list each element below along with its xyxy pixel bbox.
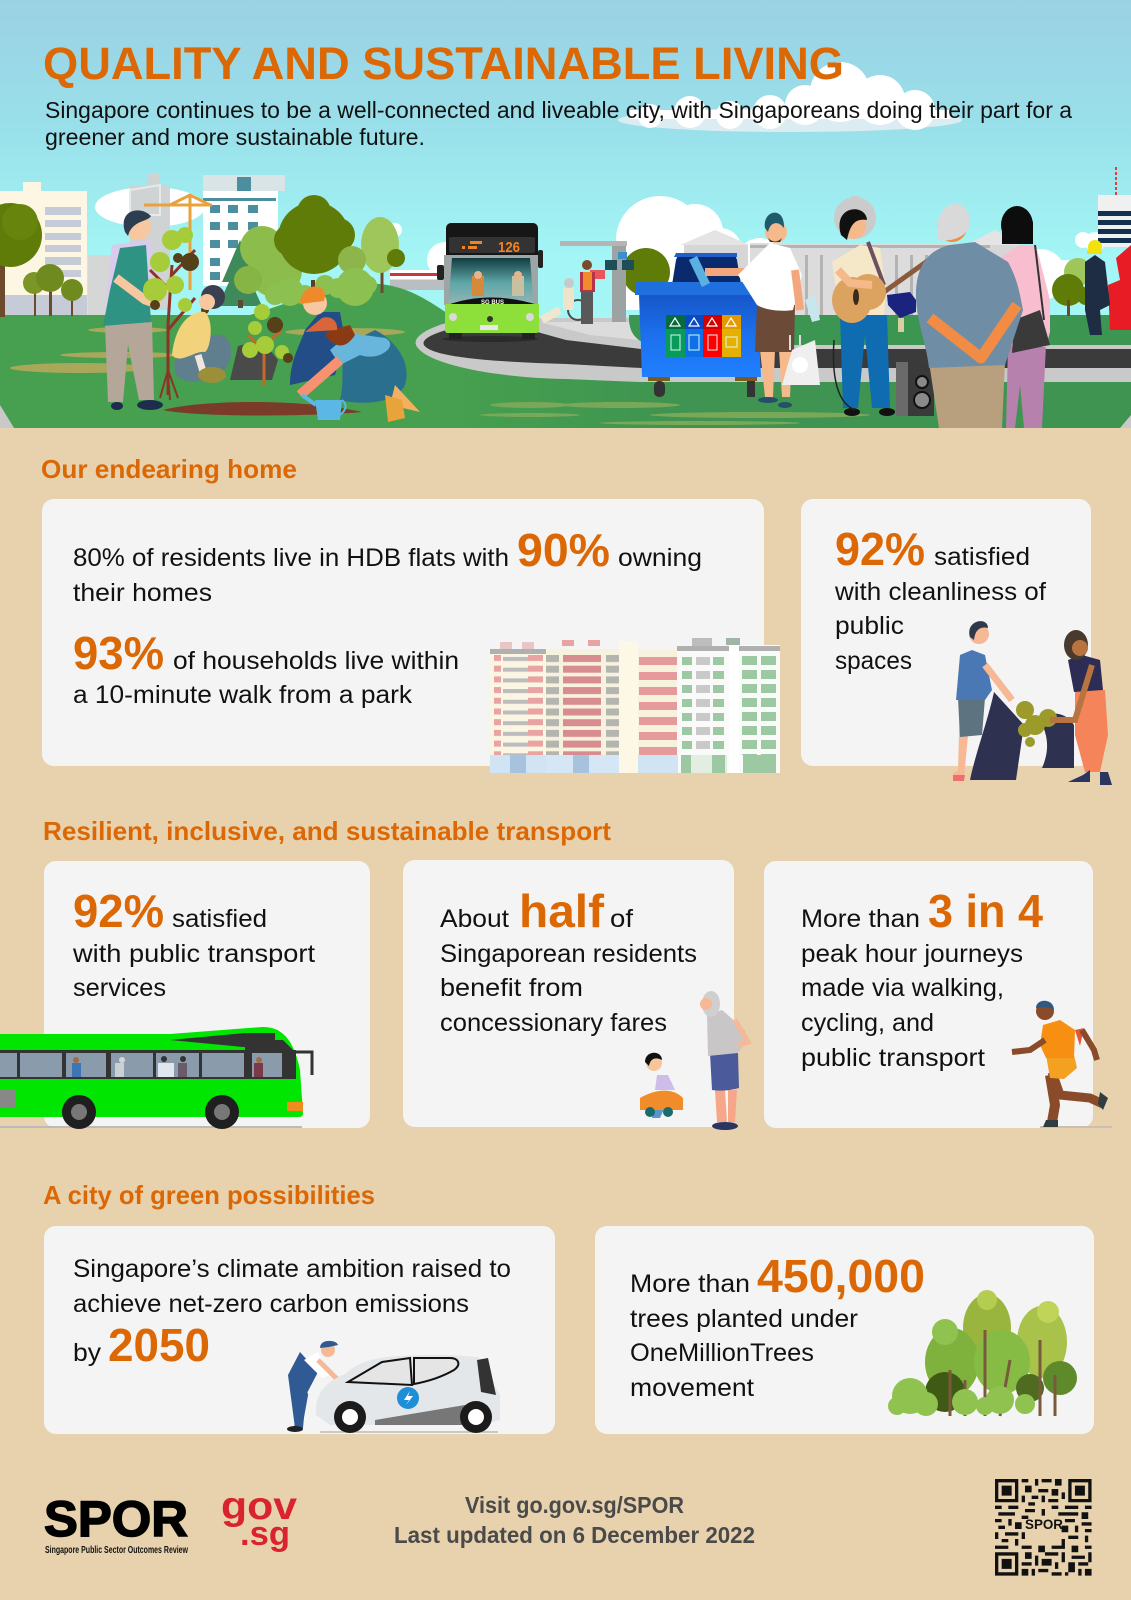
housing stat text: 80% of residents live in HDB flats with — [73, 544, 509, 572]
footer text: Visit go.gov.sg/SPOR — [465, 1492, 684, 1518]
bus bay road — [416, 318, 1131, 382]
striped tower — [1098, 167, 1131, 247]
concession text: of — [610, 905, 633, 933]
soil patch — [163, 402, 362, 416]
person: man in safety vest — [580, 260, 595, 324]
park access stat text: of households live within — [173, 647, 459, 675]
grass beyond road — [629, 315, 1131, 345]
walk cycle transit text: peak hour journeys — [801, 940, 1023, 968]
housing stat text: 90% — [517, 524, 610, 576]
park access stat text: 93% — [73, 627, 164, 679]
net zero text: by — [73, 1339, 102, 1367]
intro text — [45, 97, 1072, 150]
icon: grove of trees — [888, 1290, 1077, 1416]
heart sculptures — [805, 292, 916, 332]
walk cycle transit text: More than — [801, 905, 920, 933]
icon: grandmother and child — [640, 991, 748, 1130]
icon: runner — [1012, 1001, 1112, 1128]
person: busker with guitar — [832, 209, 940, 416]
net zero text — [73, 1255, 511, 1371]
background clouds — [95, 187, 1105, 310]
trees left — [0, 195, 405, 317]
parliament building — [680, 196, 1020, 315]
hill and grass — [0, 283, 450, 428]
heading: transport: Resilient, inclusive, and sustainable transport — [43, 816, 611, 846]
person: man with orange helmet — [290, 286, 345, 385]
person: older man from behind — [916, 204, 1023, 428]
icon: volunteers bagging leaves — [952, 621, 1112, 785]
transport satisfaction text — [72, 885, 315, 1002]
cleanliness stat text: spaces — [835, 647, 912, 675]
panel: trees planted — [595, 1226, 1094, 1434]
public bus front: 126 — [498, 239, 520, 256]
panel: walk cycle transit — [764, 861, 1112, 1128]
title: QUALITY AND SUSTAINABLE LIVING — [43, 38, 844, 89]
cleanliness stat text — [834, 523, 1046, 675]
cleanliness stat text: satisfied — [934, 543, 1030, 571]
park access stat text — [73, 627, 459, 709]
housing stat text: their homes — [73, 579, 212, 607]
garden bag and shrub — [230, 304, 293, 385]
sky — [0, 0, 1131, 428]
plastic bag — [782, 335, 820, 385]
elevated train — [390, 270, 605, 290]
icon: HDB flats — [490, 638, 780, 773]
trees planted text: movement — [630, 1374, 754, 1402]
trees planted text: 450,000 — [757, 1250, 925, 1302]
distant buildings left — [0, 173, 285, 315]
housing stat text — [73, 524, 702, 607]
trees planted text: More than — [630, 1270, 750, 1298]
panel: cleanliness — [801, 499, 1112, 785]
public bus front — [437, 223, 543, 342]
panel: public transport satisfaction — [0, 861, 370, 1129]
intro text: Singapore continues to be a well-connected and liveable city, with Singaporeans doing their part for a — [45, 97, 1072, 123]
panel: housing — [42, 499, 780, 773]
trees right — [620, 248, 1095, 316]
person: man recycling bottle — [693, 213, 802, 408]
person: wheelchair user — [542, 278, 588, 320]
concession text: About — [440, 905, 509, 933]
public bus front: SG BUS — [481, 300, 504, 306]
concession text: half — [519, 885, 605, 937]
concession text — [440, 885, 697, 1037]
walk cycle transit text — [801, 885, 1043, 1072]
bus shelter — [560, 241, 634, 322]
trees planted text — [630, 1250, 925, 1402]
sapling — [143, 227, 215, 400]
recycling bin — [635, 253, 761, 397]
net zero text: 2050 — [108, 1319, 210, 1371]
person: woman from behind — [1001, 206, 1050, 428]
concession text: benefit from — [440, 974, 583, 1002]
watering can — [302, 395, 346, 420]
heading: our endearing home: Our endearing home — [41, 454, 297, 484]
walk cycle transit text: cycling, and — [801, 1009, 934, 1037]
cleanliness stat text: public — [835, 612, 904, 640]
housing stat text: owning — [618, 544, 702, 572]
heading: green possibilities: A city of green possibilities — [43, 1180, 375, 1210]
icon: mechanic and electric car — [287, 1341, 500, 1433]
park access stat text: a 10-minute walk from a park — [73, 681, 413, 709]
foreground grass — [0, 327, 1131, 428]
transport satisfaction text: services — [73, 974, 166, 1002]
walk cycle transit text: public transport — [801, 1044, 985, 1072]
panel: header scene — [0, 0, 1131, 428]
cleanliness stat text: with cleanliness of — [834, 578, 1046, 606]
logo: SPOR: Singapore Public Sector Outcomes Review — [45, 1545, 188, 1556]
transport satisfaction text: with public transport — [72, 940, 315, 968]
footer text — [394, 1492, 755, 1548]
logo: gov.sg: gov — [221, 1485, 297, 1528]
transport satisfaction text: 92% — [73, 885, 164, 937]
person: gardener — [103, 210, 163, 410]
QR code — [995, 1479, 1092, 1576]
firefighter and fire vehicle — [1085, 240, 1131, 335]
trees planted text: OneMillionTrees — [630, 1339, 814, 1367]
panel: net zero — [44, 1226, 555, 1434]
logo: SPOR: SPOR — [44, 1491, 188, 1547]
speaker — [896, 362, 934, 416]
logo: gov.sg: .sg — [240, 1515, 290, 1553]
cloud behind title — [618, 62, 962, 132]
person: woman with cap — [300, 317, 420, 422]
panel: concessionary fares — [403, 860, 748, 1130]
net zero text: Singapore’s climate ambition raised to — [73, 1255, 511, 1283]
footer text: Last updated on 6 December 2022 — [394, 1522, 755, 1548]
walk cycle transit text: made via walking, — [801, 974, 1004, 1002]
net zero text: achieve net-zero carbon emissions — [73, 1290, 469, 1318]
concession text: concessionary fares — [440, 1009, 667, 1037]
concession text: Singaporean residents — [440, 940, 697, 968]
person: woman kneeling — [172, 285, 231, 383]
walk cycle transit text: 3 in 4 — [928, 885, 1043, 937]
cleanliness stat text: 92% — [835, 523, 925, 575]
logo: gov.sg — [221, 1485, 297, 1553]
trees planted text: trees planted under — [630, 1305, 858, 1333]
QR code: SPOR — [1025, 1516, 1063, 1532]
intro text: greener and more sustainable future. — [45, 124, 425, 150]
icon: green bus — [0, 1027, 312, 1129]
transport satisfaction text: satisfied — [172, 905, 267, 933]
